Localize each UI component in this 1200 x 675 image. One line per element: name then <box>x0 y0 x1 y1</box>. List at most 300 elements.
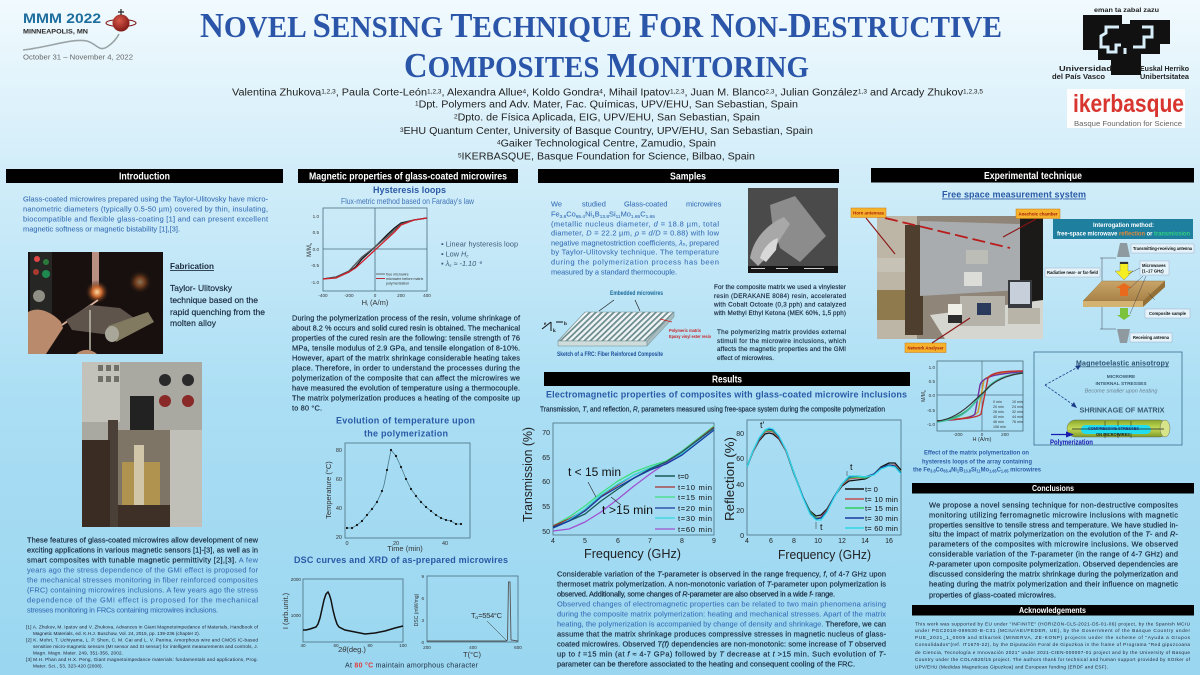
chart: XRD: 1000 <box>291 613 301 618</box>
chart: reflection vs frequency: t= 15 min <box>865 504 898 513</box>
text: references <box>26 624 259 668</box>
heading: acknowledgements <box>912 605 1194 616</box>
diagram: matrix shrinkage and anisotropy: SHRINKAGE OF MATRIX <box>1080 406 1164 414</box>
text: conclusions: monitoring utilizing ferromagnetic microwire inclusions with magnetic <box>929 510 1178 520</box>
chart: transmission vs frequency: 65 <box>542 455 550 462</box>
chart: reflection vs frequency: 12 <box>838 538 846 545</box>
diagram: free-space interrogation: Interrogation method: <box>1093 222 1154 229</box>
authors: and Arcady Zhukov <box>867 88 963 98</box>
text: polymerization: properties of the cured resin are the following: tensile strength of 76 <box>292 334 520 342</box>
text: polymerization: MPa, tensile modulus of 2.9 GPa, and tensile elongation of 8-10%. <box>292 344 520 352</box>
diagram: matrix shrinkage and anisotropy <box>1034 352 1182 446</box>
text: conclusions: considerable variation of the T-parameter (in the range of 4-7 GHz) and <box>929 550 1178 558</box>
text: acknowledgements <box>915 622 1191 670</box>
text: polymerization: During the polymerization process of the resin, volume shrinkage of <box>292 314 521 322</box>
chart: transmission vs frequency: t=60 min <box>678 525 712 534</box>
chart: transmission vs frequency: 5 <box>583 538 587 545</box>
diagram: matrix shrinkage and anisotropy: INTERNAL STRESSES <box>1095 381 1147 387</box>
arrow: antenna path <box>885 218 1010 248</box>
chart: hysteresis during polymerization: -1.0 <box>927 422 935 427</box>
text: sample description: Co <box>566 210 576 218</box>
chart: temperature evolution: 0 <box>345 541 349 547</box>
logo: UPV/EHU <box>1052 7 1189 81</box>
diagram: fiber reinforced composite: Polymeric matrix <box>669 328 701 333</box>
text: conclusions: parameters of the composites with microwire inclusions. We observed <box>929 540 1178 548</box>
caption: matrix polymerization effect: 65.4 <box>943 468 952 474</box>
chart: hysteresis during polymerization: 26 min <box>993 410 1004 414</box>
text: fabrication: Fabrication <box>170 261 214 271</box>
authors: , Mihail Ipatov <box>603 88 670 98</box>
text: sample description: Glass-coated <box>624 200 668 208</box>
chart: hysteresis during polymerization: M/M <box>921 392 927 402</box>
chart: reflection vs frequency: t= 60 min <box>865 524 898 533</box>
text: references: Magnetic Materials, ed. K.H.J. Buschow, Vol. 24, 2015, pp. 139-236 (chapter 2). <box>33 631 200 636</box>
text: acknowledgements: This work was supported by EU under "INFINITE" (HORIZON-CL5-2021-D5-01-06) project, by the Spanish MCIU <box>915 622 1191 626</box>
text: applications: years ago the stress dependence of the GMI effect is proposed for <box>27 566 259 574</box>
diagram: free-space interrogation <box>1045 219 1194 343</box>
chart: transmission vs frequency: Transmission (%) <box>520 427 535 522</box>
subheading: free space measurement system: Free space measurement system <box>942 190 1086 200</box>
chart: hysteresis loop: 1.0 <box>313 214 319 219</box>
chart: hysteresis loop: 0.5 <box>313 230 319 235</box>
chart: reflection vs frequency: 0 <box>740 533 744 540</box>
text: composite matrix: resin (DERAKANE 8084) resin, accelerated <box>714 293 846 300</box>
text: sample description: 3.8 <box>560 214 567 220</box>
text: sample description: 1.65 <box>646 214 655 220</box>
chart: DSC: 400 <box>469 645 477 650</box>
chart: reflection vs frequency: 6 <box>769 538 773 545</box>
caption: matrix polymerization effect: Co <box>936 466 944 474</box>
chart: DSC: T <box>471 611 476 620</box>
affiliations: 1 <box>415 102 419 108</box>
authors: 1,3 <box>858 90 868 96</box>
chart: hysteresis during polymerization: 200 <box>1001 432 1009 437</box>
callout: anechoic chamber: Anechoic chamber <box>1018 212 1058 218</box>
authors: 2,3 <box>765 90 775 96</box>
authors: 1,2,3 <box>670 90 685 96</box>
text: sample description: B <box>595 210 600 218</box>
text: acknowledgements: under PGC2018-099530-B-C31 (MCIU/AEI/FEDER, UE), by the Government of the Basque Country under <box>915 628 1190 633</box>
text: applications: the mechanical stresses monitoring in fiber reinforced composites <box>27 576 258 584</box>
title <box>200 6 1002 85</box>
chart: hysteresis loop: microwire before matrix <box>386 277 424 281</box>
heading: experimental technique: Experimental technique <box>984 171 1082 182</box>
chart: hysteresis during polymerization: 76 min <box>1012 420 1023 424</box>
heading: experimental technique <box>871 168 1194 182</box>
chart: hysteresis during polymerization: -200 <box>953 432 963 437</box>
text: polymerization: The matrix polymerization produces a heating of the composite up <box>292 394 520 402</box>
heading: results: Results <box>712 374 742 386</box>
chart: reflection vs frequency: 80 <box>736 431 744 438</box>
chart: XRD: 2000 <box>291 577 301 582</box>
text: fabrication: molten alloy <box>170 318 217 328</box>
chart: hysteresis during polymerization: 0 <box>981 432 984 437</box>
subheading: flux-metric method: Flux-metric method based on Faraday's law <box>341 197 474 206</box>
chart: hysteresis loop: s <box>308 243 313 245</box>
affiliations <box>400 100 813 162</box>
chart: DSC <box>414 574 522 659</box>
logo: UPV/EHU: Universidad <box>1059 66 1112 73</box>
panel: experimental technique <box>851 168 1194 474</box>
text: conclusions: R-parameter upon composite polymerization. Observed dependencies are <box>929 560 1178 568</box>
text: polymerization: place. Therefore, in order to understand the processes during the <box>292 364 520 372</box>
chart: reflection vs frequency: 40 <box>736 482 744 489</box>
chart: hysteresis during polymerization: 0.5 <box>929 379 935 384</box>
title: COMPOSITES MONITORING <box>404 46 809 85</box>
chart: hysteresis during polymerization: H (A/m) <box>973 437 992 443</box>
chart: XRD: 40 <box>300 643 306 648</box>
text: sample description: Fe <box>551 210 560 218</box>
text: applications: dependence of the GMI effect is proposed for the mechanical <box>27 596 258 604</box>
text: sample description: 1 <box>592 214 595 220</box>
diagram: matrix shrinkage and anisotropy: ON MICROWIRES <box>1096 432 1130 437</box>
chart: DSC: 6 <box>421 596 424 601</box>
subheading: electromagnetic properties: Electromagnetic properties of composites with glass-coated microwire inclusions <box>546 390 907 400</box>
panel: results <box>520 372 910 668</box>
label: receiving antenna: Receiving antenna <box>1133 335 1170 340</box>
text: results discussion: Considerable variation of the T-parameter is observed in the range frequency, f, of 4-7 GHz upon <box>557 570 886 578</box>
chart: hysteresis during polymerization: -0.5 <box>927 408 935 413</box>
heading: introduction <box>6 169 283 183</box>
heading: samples <box>538 169 839 183</box>
chart: hysteresis loop: -400 <box>318 293 328 298</box>
authors: 1,2,3 <box>321 90 336 96</box>
text: glass-coated microwires intro: magnetic softness or magnetic bistability [1],[3]. <box>23 224 180 234</box>
text: glass-coated microwires intro: biocompatible and flexible glass-coating [1] and can present excellent <box>23 214 268 224</box>
text: sample description: 65.4 <box>576 214 585 220</box>
text: sample description: by Taylor-Ulitovsky technique. The temperature <box>551 248 719 256</box>
text: sample description: We <box>551 200 562 208</box>
chart: DSC: 3 <box>421 618 424 623</box>
subheading: DSC and XRD: DSC curves and XRD of as-prepared microwires <box>294 555 508 565</box>
chart: transmission vs frequency: t=20 min <box>678 504 712 513</box>
text: sample description: negative magnetostriction coefficients, λs, prepared <box>551 238 719 248</box>
chart: transmission vs frequency <box>520 423 716 561</box>
photo: fabrication setup <box>28 252 163 354</box>
text: applications: stresses monitoring in FRCs containing microwires inclusions. <box>27 606 218 614</box>
authors: 1,2,3 <box>427 90 442 96</box>
diagram: matrix shrinkage and anisotropy: Become smaller upon heating <box>1085 388 1158 394</box>
text: conclusions <box>929 500 1179 600</box>
text: fabrication: Taylor- Ulitovsky <box>170 283 233 293</box>
chart: transmission vs frequency: t=15 min <box>678 493 712 502</box>
authors: , Paula Corte-León <box>336 88 427 98</box>
chart: transmission vs frequency: 50 <box>542 529 550 536</box>
subheading: hysteresis loops: Hysteresis loops <box>373 185 446 195</box>
text: glass-coated microwires intro: Glass-coated microwires prepared using the Taylor-Ulitovsky have micro- <box>23 194 269 204</box>
affiliations: 4 <box>497 140 501 146</box>
chart: hysteresis loop: H <box>362 298 367 307</box>
text: acknowledgements: PUE_2021_1_0009 and Elkartek (MINERVA, ZE-KONP) projects under the scheme of "Ayuda a Grupos <box>915 635 1191 640</box>
diagram: matrix shrinkage and anisotropy: COMPRESSIVE STRESSES <box>1088 426 1139 431</box>
heading: samples: Samples <box>670 172 706 182</box>
heading: conclusions: Conclusions <box>1032 484 1074 493</box>
chart: hysteresis loop: 0.0 <box>313 247 319 252</box>
caption: matrix polymerization effect: 1.65 <box>1001 468 1009 474</box>
text: acknowledgements: Country under the COLAB20/15 project. The authors thank for technical and human support provided by SGIker of <box>915 657 1191 662</box>
chart: transmission vs frequency: t=30 min <box>678 514 712 523</box>
caption: matrix polymerization effect: the Fe <box>913 466 932 474</box>
chart: reflection vs frequency: Reflection (%) <box>722 437 737 521</box>
list: loop characteristics: ▪ λ <box>441 259 449 268</box>
chart: hysteresis during polymerization: 106 min <box>993 425 1006 429</box>
chart: reflection vs frequency: 16 <box>885 538 893 545</box>
chart: hysteresis during polymerization: 40 min <box>993 415 1004 419</box>
chart: DSC: 600 <box>514 645 522 650</box>
chart: transmission vs frequency: t=10 min <box>678 483 712 492</box>
text: polymerization: have measured the evolution of temperature using a thermocouple. <box>292 384 520 392</box>
text: results discussion <box>557 570 887 668</box>
text: sample description <box>551 200 722 276</box>
panel: samples <box>538 169 846 362</box>
text: results discussion: thermoset matrix polymerization. A non-monotonic variation of T-parameter upon polymerization is <box>557 580 886 588</box>
diagram: fiber reinforced composite: k <box>553 329 556 334</box>
chart: reflection vs frequency: t= 10 min <box>865 495 898 504</box>
caption: matrix polymerization effect: 1 <box>957 468 960 474</box>
caption: matrix polymerization effect: 11 <box>976 468 981 474</box>
text: results discussion: assume that the matrix shrinkage produces compressive stresses in magnetic nucleus of glass- <box>557 630 887 638</box>
chart: reflection vs frequency <box>722 420 901 562</box>
text: polymerization: polymerization of the composite that can affect the microwires we <box>292 374 520 382</box>
chart: reflection vs frequency: 14 <box>861 538 869 545</box>
text: sample description: Si <box>609 210 616 218</box>
text: results discussion: coated microwires. Observed T(f) dependencies are non-monotonic: some increase of T observed <box>557 640 886 648</box>
list: loop characteristics: c <box>466 254 469 258</box>
diagram: matrix shrinkage and anisotropy: Polymerization <box>1050 440 1093 446</box>
chart: transmission vs frequency: t=0 <box>678 472 689 481</box>
diagram: fiber reinforced composite <box>542 290 711 358</box>
text: conclusions: We propose a novel sensing technique for non-destructive composites <box>929 500 1178 510</box>
chart: reflection vs frequency: t <box>820 522 823 532</box>
logo: MMM 2022 conference: MMM 2022 <box>23 10 101 26</box>
chart: DSC: =554°C <box>478 611 503 620</box>
photo: SEM image <box>748 188 838 273</box>
caption: matrix polymerization effect: 1.65 <box>989 468 997 474</box>
chart: temperature evolution: Temperature (°C) <box>324 461 333 519</box>
chart: hysteresis during polymerization: 1.0 <box>929 365 935 370</box>
chart: hysteresis loop: 200 <box>397 293 405 298</box>
text: polymerization: about 8.2 % occurs and solid cured resin is obtained. The mechanical <box>292 324 520 332</box>
chart: DSC: 200 <box>423 645 431 650</box>
chart: XRD: I (arb.unit.) <box>281 592 290 629</box>
chart: transmission vs frequency: 7 <box>648 538 652 545</box>
chart: transmission vs frequency: 8 <box>680 538 684 545</box>
list: loop characteristics <box>441 240 518 268</box>
logo: UPV/EHU: Euskal Herriko <box>1140 66 1189 73</box>
list: loop characteristics: -6 <box>478 260 483 265</box>
affiliations: 2 <box>454 114 458 120</box>
text: fabrication: rapid quenching from the <box>170 307 265 317</box>
text: conclusions: discussed considering the matrix shrinkage during the polymerization and <box>929 570 1178 578</box>
authors: , Alexandra Allue <box>442 88 523 98</box>
authors: 1,2,3,5 <box>963 90 984 96</box>
chart: hysteresis loop: -0.5 <box>311 263 319 268</box>
logo: ikerbasque <box>1067 89 1185 128</box>
text: results discussion: up to t =15 min (at f ≈ 4-7 GPa) followed by T decrease at t >15 min. Such evolution of T- <box>557 650 887 658</box>
text: sample description: 11 <box>616 214 621 220</box>
label: microwaves: (1–17 GHz) <box>1142 268 1164 274</box>
chart: transmission vs frequency: t < 15 min <box>568 465 621 479</box>
text: composite matrix <box>713 284 846 317</box>
authors: , Koldo Gondra <box>526 88 600 98</box>
text: sample description: measured by a standard thermocouple. <box>551 268 677 276</box>
affiliations: Gaiker Technological Centre, Zamudio, Spain <box>501 138 716 150</box>
chart: temperature evolution: 40 <box>336 506 342 512</box>
callout: horn antennas: Horn antennas <box>853 210 884 216</box>
text: polymerizing matrix: The polymerizing matrix provides external <box>717 329 846 336</box>
chart: transmission vs frequency: t >15 min <box>602 503 653 517</box>
label: radiative field <box>1045 268 1100 277</box>
chart: hysteresis during polymerization: 32 min <box>1012 410 1023 414</box>
chart: reflection vs frequency: t= 30 min <box>865 514 898 523</box>
text: fabrication <box>170 261 265 328</box>
diagram: fiber reinforced composite: h <box>564 322 567 327</box>
chart: hysteresis during polymerization: 0.0 <box>929 393 935 398</box>
text: results discussion: Observed changes of electromagnetic properties can be related to two main phenomena arising <box>557 600 886 608</box>
text: acknowledgements: de Ciencia, Tecnología e Innovación 2021" under 2021-CIEN-000007-01 project and by the University of Basque <box>915 650 1190 655</box>
chart: transmission vs frequency: Frequency (GHz) <box>584 546 681 561</box>
text: results discussion: heating, the polymerization is accompanied by change of density and shrinkage. Therefore, we can <box>557 620 886 628</box>
chart: transmission vs frequency: 60 <box>542 479 550 486</box>
text: references: [1] A. Zhukov, M. Ipatov and V. Zhukova, Advances in Giant Magnetoimpedance of Materials, Handbook of <box>26 624 259 630</box>
text: polymerizing matrix: affects the magnetic properties and the GMI <box>717 346 846 353</box>
chart: DSC: 9 <box>421 574 424 579</box>
text: sample description: studied <box>582 200 606 208</box>
chart: hysteresis loop: 400 <box>423 293 431 298</box>
label: composite sample: Composite sample <box>1149 311 1187 316</box>
label: transmitting-receiving antenna: Transmitting-receiving antenna <box>1133 246 1193 251</box>
chart: temperature evolution: 80 <box>336 448 342 454</box>
chart: reflection vs frequency: Frequency (GHz) <box>778 547 871 562</box>
chart: DSC: T(°C) <box>463 650 481 659</box>
text: fabrication: technique based on the <box>170 295 258 305</box>
authors: 4 <box>523 90 527 96</box>
text: glass-coated microwires intro <box>23 194 269 234</box>
caption: matrix polymerization effect <box>913 450 1041 474</box>
panel: magnetic properties <box>281 169 522 670</box>
text: results discussion: observed. Additionally, some changes of R-parameter are also observed in a wide f- range. <box>557 590 835 598</box>
caption: matrix polymerization effect: microwires <box>1009 466 1041 474</box>
chart: temperature evolution: 40 <box>442 541 448 547</box>
logo: MMM 2022 conference <box>23 9 136 62</box>
logo: ikerbasque: Basque Foundation for Science <box>1074 119 1182 128</box>
chart: reflection vs frequency: t <box>850 462 853 472</box>
affiliations: Dpto. de Física Aplicada, EIG, UPV/EHU, San Sebastian, Spain <box>458 112 760 124</box>
caption: matrix polymerization effect: hysteresis loops of the array containing <box>922 458 1032 466</box>
subheading: evolution of temperature: Evolution of temperature upon <box>336 416 475 426</box>
panel: introduction <box>6 169 283 668</box>
diagram: free-space interrogation: free-space microwave reflection or transmission <box>1057 230 1190 238</box>
caption: measurement: Transmission, T, and reflection, R, parameters measured using free-space system during the composite polymerization <box>540 406 885 414</box>
caption: matrix polymerization effect: Si <box>971 466 977 474</box>
text: sample description: microwires <box>686 200 722 208</box>
chart: temperature evolution <box>324 443 470 553</box>
chart: XRD: 2θ(deg.) <box>338 645 366 654</box>
text: sample description: 1.65 <box>631 214 641 220</box>
chart: DSC: DSC (mW/mg) <box>414 593 420 626</box>
chart: transmission vs frequency: 6 <box>616 538 620 545</box>
text: polymerizing matrix: stimuli for the microwire inclusions, which <box>717 338 846 345</box>
caption: matrix polymerization effect: B <box>959 466 964 474</box>
text: sample description: (metallic nucleus diameter, d = 18.8 µm, total <box>551 220 719 228</box>
label: microwaves: Microwaves <box>1142 263 1166 268</box>
subheading: evolution of temperature: the polymerization <box>364 428 448 438</box>
label: receiving antenna <box>1130 333 1172 342</box>
chart: hysteresis loop: (A/m) <box>368 298 389 307</box>
panel: conclusions <box>912 483 1194 600</box>
logo: UPV/EHU: eman ta zabal zazu <box>1094 7 1159 14</box>
heading: magnetic properties: Magnetic properties of glass-coated microwires <box>309 172 507 182</box>
chart: transmission vs frequency: 55 <box>542 504 550 511</box>
text: applications: (FRC) containing microwires inclusions. A few years ago the stress <box>27 586 258 594</box>
photo: microwire machine <box>82 362 202 527</box>
caption: matrix polymerization effect: C <box>997 466 1001 474</box>
affiliations: 3 <box>400 128 404 134</box>
note: amorphous character: At 80 °C maintain amorphous character <box>345 662 479 670</box>
diagram: fiber reinforced composite: Embedded microwires <box>610 290 663 297</box>
diagram: matrix shrinkage and anisotropy: Magnetoelastic anisotropy <box>1076 360 1169 368</box>
subheading: evolution of temperature <box>336 416 475 438</box>
text: sample description: during the polymerization process has been <box>551 258 719 266</box>
chart: transmission vs frequency: 70 <box>542 430 550 437</box>
affiliations: Dpt. Polymers and Adv. Mater, Fac. Químicas, UPV/EHU, San Sebastian, Spain <box>419 100 798 110</box>
list: loop characteristics: s <box>449 263 452 268</box>
callout: anechoic chamber <box>1003 209 1060 237</box>
chart: hysteresis during polymerization: 10 min <box>1012 400 1023 404</box>
chart: hysteresis loop: M/M <box>307 245 313 257</box>
text: conclusions: properties sensitive to tensile stress and temperature. We have studied in- <box>929 520 1179 530</box>
chart: XRD <box>281 577 407 654</box>
label: transmitting-receiving antenna <box>1131 244 1194 253</box>
chart: temperature evolution: 60 <box>336 477 342 483</box>
logo: MMM 2022 conference: October 31 – November 4, 2022 <box>23 52 133 62</box>
text: applications: exciting applications in various magnetic sensors [1]-[3], as well as in <box>27 546 258 554</box>
label: radiative field: Radiative near- or far-field <box>1047 270 1098 275</box>
chart: hysteresis loop: -200 <box>344 293 354 298</box>
chart: temperature evolution: 20 <box>336 535 342 541</box>
text: applications: These features of glass-coated microwires allow development of new <box>27 536 259 544</box>
text: results discussion: during the composite matrix polymerization: heating and mechanical stresses. Apart of the matrix <box>557 610 886 618</box>
chart: reflection vs frequency: 60 <box>736 456 744 463</box>
text: sample description: Mo <box>621 210 631 218</box>
authors: , Juan M. Blanco <box>684 88 766 98</box>
chart: reflection vs frequency: 20 <box>736 508 744 515</box>
text: acknowledgements: UPV/EHU (Medidas Magneticas Gipuzkoa) and European funding (ERDF and ESF). <box>915 664 1108 670</box>
chart: reflection vs frequency: 8 <box>792 538 796 545</box>
text: composite matrix: with Cobalt Octoate (0,3 pph) and catalyzed <box>713 302 846 308</box>
label: composite sample <box>1145 309 1190 318</box>
text: polymerization: However, apart of the matrix shrinkage considerable heating takes <box>292 354 520 362</box>
text: polymerizing matrix <box>717 329 846 362</box>
photo: lab setup <box>877 216 1043 339</box>
heading: acknowledgements: Acknowledgements <box>1019 606 1086 615</box>
chart: DSC: cr <box>475 615 479 620</box>
chart: XRD: 80 <box>367 643 373 648</box>
text: sample description: 13.8 <box>600 214 609 220</box>
text: conclusions: situ the impact of matrix polymerization on the evolution of the T- and R- <box>929 530 1179 538</box>
diagram: matrix shrinkage and anisotropy: MICROWIRE <box>1107 374 1136 380</box>
text: glass-coated microwires intro: nanometric diameters (typically 0.5-50 µm) covered by thin, insulating, <box>23 204 268 214</box>
chart: transmission vs frequency: 9 <box>712 538 716 545</box>
text: references: [3] M.H. Phan and H.X. Peng, Giant magnetoimpedance materials: fundamentals and applications, Prog. <box>26 657 258 662</box>
diagram: fiber reinforced composite: Epoxy vinyl ester resin <box>669 334 711 339</box>
caption: matrix polymerization effect: 13.8 <box>963 468 972 474</box>
chart: hysteresis loop: 0 <box>374 293 377 298</box>
text: polymerization <box>292 314 521 412</box>
caption: matrix polymerization effect: 3.8 <box>930 468 936 474</box>
chart: hysteresis loop: polymerization <box>386 282 409 286</box>
text: composite matrix: with Methyl Ethyl Ketona (MEK 60%, 1,5 pph) <box>713 310 846 317</box>
